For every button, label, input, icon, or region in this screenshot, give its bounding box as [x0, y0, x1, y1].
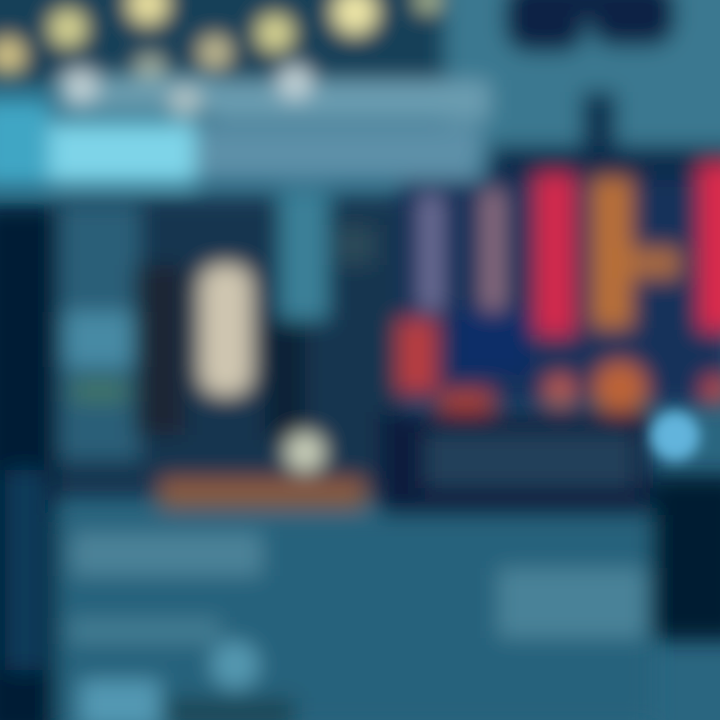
left dark column	[0, 205, 56, 720]
lower dark text panel	[380, 412, 650, 542]
right chart panel	[398, 165, 720, 415]
orange band	[160, 478, 365, 508]
central left panel	[56, 190, 401, 508]
bottom right dark block	[652, 475, 720, 640]
top right dark emblem	[490, 0, 720, 180]
light blue circle marker	[650, 411, 700, 461]
pale circle	[286, 433, 324, 471]
cream figure	[200, 265, 252, 395]
title band	[0, 65, 490, 185]
bottom teal section	[56, 515, 652, 720]
header: dark banner with lights	[0, 0, 720, 160]
left column lower tint	[5, 470, 45, 670]
